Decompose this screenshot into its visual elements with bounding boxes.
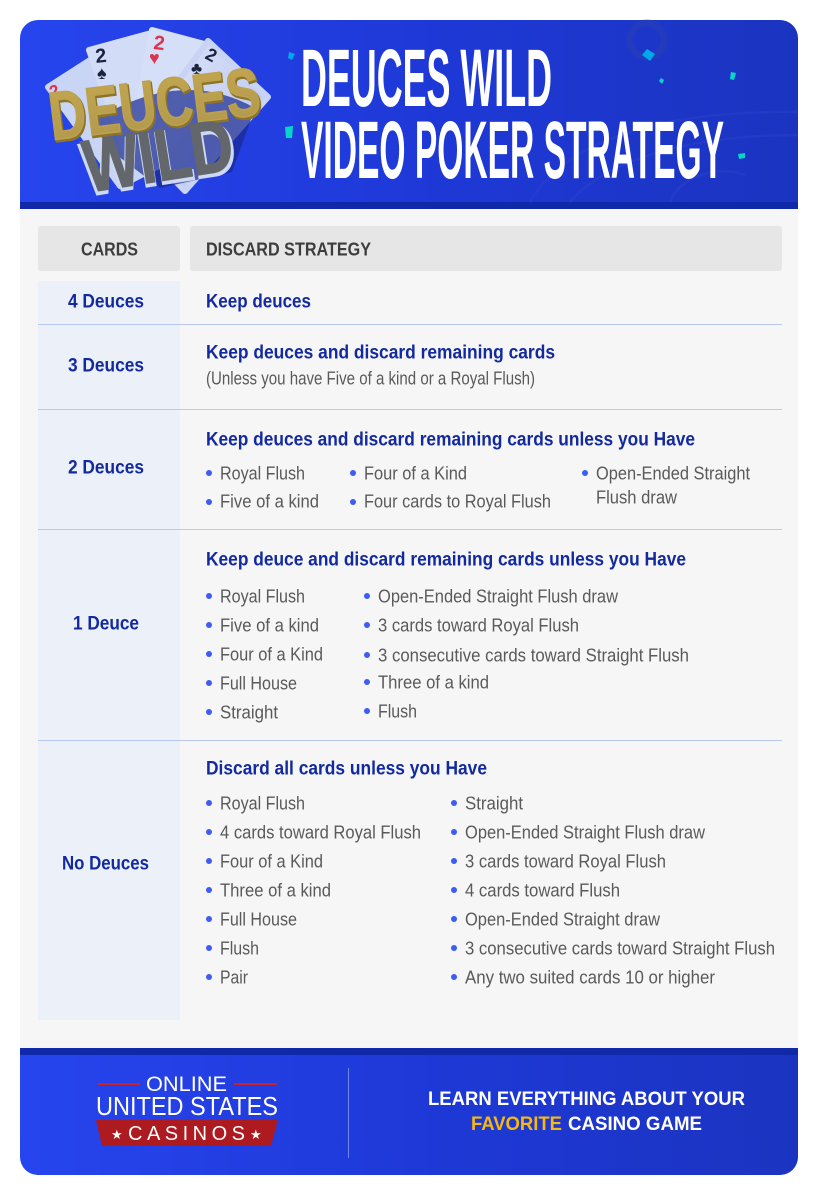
row: No Deuces: 4 cards toward Royal Flush (220, 822, 421, 842)
row: 1 Deuce: Full House (220, 672, 297, 694)
row: No Deuces: No Deuces (62, 854, 149, 874)
row: 1 Deuce: Royal Flush (220, 586, 305, 606)
header cell: cards: CARDS (81, 238, 138, 260)
title (301, 33, 724, 196)
row: 4 Deuces (68, 292, 311, 312)
table header (38, 226, 782, 271)
row: No Deuces: 4 cards toward Flush (465, 880, 620, 900)
logo: Online United States Casinos: UNITED STATES (96, 1091, 278, 1121)
row: 4 Deuces: 4 Deuces (68, 292, 144, 312)
row: 1 Deuce: Straight (220, 702, 278, 722)
row: No Deuces: Open-Ended Straight Flush draw (465, 822, 706, 842)
icon: playing cards fan: 2 (152, 32, 166, 55)
logo: Online United States Casinos: ★ (250, 1127, 262, 1142)
row: 1 Deuce: Open-Ended Straight Flush draw (378, 586, 619, 606)
icon: playing cards fan: ♣ (191, 59, 202, 78)
row: 1 Deuce: Five of a kind (220, 614, 319, 636)
row: No Deuces: Full House (220, 908, 297, 930)
row: 3 Deuces (68, 342, 555, 388)
row: 1 Deuce: Four of a Kind (220, 644, 323, 664)
row: 3 Deuces: 3 Deuces (68, 356, 144, 376)
row: No Deuces: Flush (220, 938, 259, 958)
cards column background (38, 281, 180, 1020)
row: No Deuces: Three of a kind (220, 880, 331, 900)
logo text: DEUCES: DEUCES (45, 54, 264, 155)
footer call to action: LEARN EVERYTHING ABOUT YOUR (428, 1089, 745, 1110)
row: 2 Deuces: Four of a Kind (364, 462, 467, 484)
row: 2 Deuces: 2 Deuces (68, 458, 144, 478)
row: 2 Deuces (68, 430, 750, 512)
row: 2 Deuces: Open-Ended Straight (596, 462, 750, 484)
row: No Deuces: 3 consecutive cards toward Straight Flush (465, 938, 775, 958)
row: 1 Deuce: 3 cards toward Royal Flush (378, 614, 579, 636)
header cell: discard strategy (190, 226, 782, 271)
row: 1 Deuce: Flush (378, 700, 417, 722)
icon: playing cards fan: 2 (47, 81, 62, 102)
row: 2 Deuces: Five of a kind (220, 490, 319, 512)
row: 1 Deuce: 1 Deuce (73, 614, 139, 634)
footer call to action: FAVORITE (471, 1114, 562, 1135)
icon: playing cards fan: 2 (202, 44, 220, 66)
row: 1 Deuce: 3 consecutive cards toward Straight Flush (378, 644, 689, 666)
row: 2 Deuces: Keep deuces and discard remaining cards unless you Have (206, 430, 695, 450)
row: No Deuces (62, 758, 775, 988)
header cell: discard strategy: DISCARD STRATEGY (206, 238, 372, 260)
row: No Deuces: Four of a Kind (220, 850, 323, 872)
icon: playing cards fan: 2 (94, 45, 108, 68)
logo: Online United States Casinos: ONLINE (146, 1073, 227, 1096)
footer call to action: CASINO GAME (568, 1114, 702, 1135)
panel: page body (20, 180, 798, 1070)
logo text: WILD: WILD (76, 105, 241, 211)
icon: playing cards fan: ♠ (97, 63, 107, 83)
logo: Online United States Casinos: CASINOS (128, 1123, 245, 1145)
row: No Deuces: 3 cards toward Royal Flush (465, 850, 666, 872)
panel: footer (20, 1048, 798, 1175)
row: No Deuces: Pair (220, 966, 248, 988)
row: 2 Deuces: Royal Flush (220, 462, 305, 484)
icon: playing cards fan (47, 30, 268, 191)
decoration: confetti (285, 49, 745, 159)
icon: playing cards fan: ♥ (149, 48, 160, 68)
row: No Deuces: Any two suited cards 10 or higher (465, 966, 715, 988)
decoration: poker chip (630, 23, 664, 57)
logo text: WILD: WILD (78, 103, 239, 208)
decoration: roulette wheel (530, 112, 798, 202)
row: 2 Deuces: Four cards to Royal Flush (364, 490, 551, 512)
logo text: DEUCES: DEUCES (46, 55, 265, 157)
row: 1 Deuce: Three of a kind (378, 672, 489, 692)
header cell: cards (38, 226, 180, 271)
row: No Deuces: Royal Flush (220, 792, 305, 814)
row: 1 Deuce (73, 550, 689, 722)
row: 1 Deuce: Keep deuce and discard remaining cards unless you Have (206, 550, 686, 570)
row: No Deuces: Discard all cards unless you Have (206, 758, 487, 780)
row: No Deuces: Straight (465, 792, 523, 814)
row: 4 Deuces: Keep deuces (206, 292, 311, 312)
logo: Online United States Casinos: ★ (111, 1127, 123, 1142)
row: No Deuces: Open-Ended Straight draw (465, 908, 661, 930)
footer call to action (428, 1089, 745, 1135)
row: 3 Deuces: (Unless you have Five of a kind or a Royal Flush) (206, 368, 535, 388)
panel: header banner (20, 20, 798, 211)
row: 2 Deuces: Flush draw (596, 486, 678, 508)
row: 3 Deuces: Keep deuces and discard remaining cards (206, 342, 555, 364)
logo: Online United States Casinos (96, 1073, 278, 1146)
